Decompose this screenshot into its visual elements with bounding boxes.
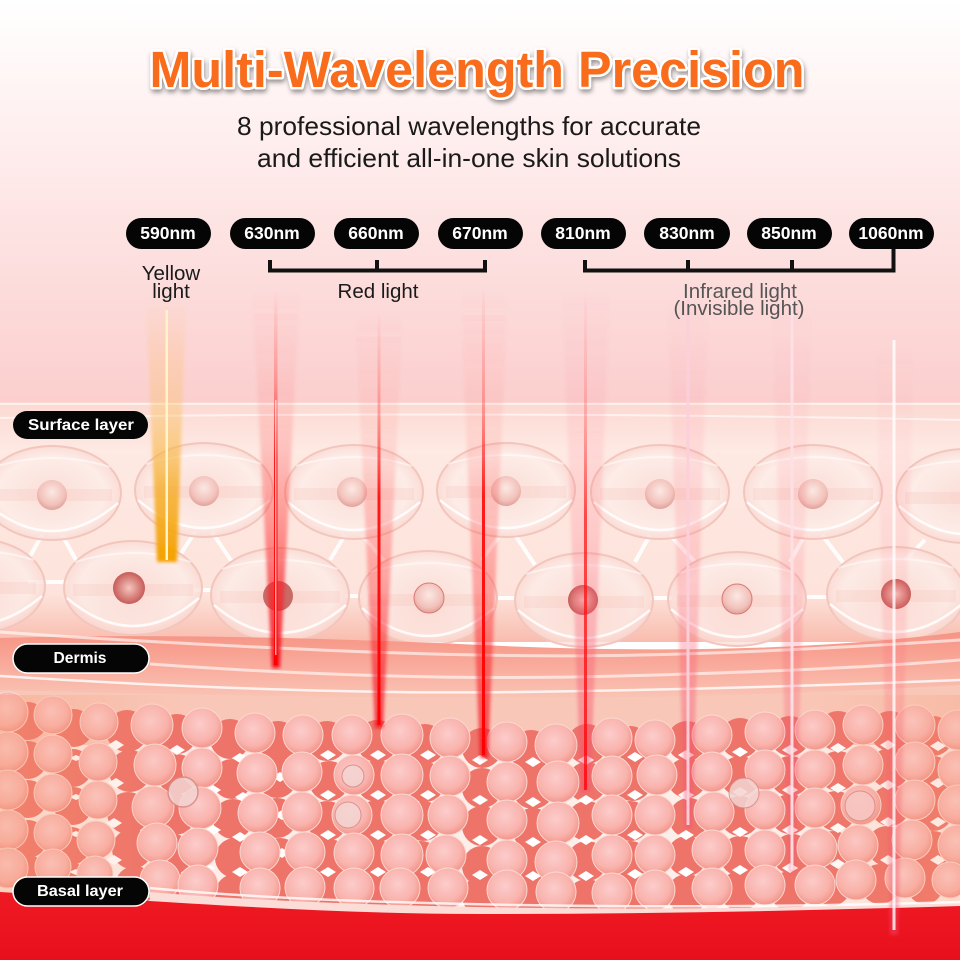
light beam: infrared 850nm: [772, 300, 812, 872]
top row cells: [0, 443, 960, 543]
bracket: red light: [270, 260, 485, 270]
tag: surface layer: [13, 411, 148, 439]
pill: 660nm: [334, 218, 419, 249]
panel: red bottom band: [0, 888, 960, 960]
label: infrared light: (Invisible light): [673, 297, 805, 320]
subtitle: and efficient all-in-one skin solutions: [257, 143, 681, 173]
epidermis cell connectors: [28, 532, 925, 598]
light beam: red 630nm: [252, 290, 300, 668]
pill: 830nm: [644, 218, 730, 249]
light beam: infrared 830nm: [668, 300, 708, 828]
pill: 1060nm: 1060nm: [858, 223, 924, 243]
pill: 670nm: [438, 218, 523, 249]
pill: 630nm: 630nm: [244, 223, 300, 243]
pill: 1060nm: [849, 218, 934, 249]
title: Multi-Wavelength Precision: [150, 41, 804, 98]
panel: basal layer balls: [0, 685, 960, 930]
highlight stem cells: [168, 765, 875, 828]
pill: 810nm: 810nm: [555, 223, 611, 243]
tag: basal layer: [13, 877, 149, 906]
tag: dermis: Dermis: [54, 650, 107, 667]
label: yellow light: light: [152, 280, 190, 303]
pill: 830nm: 830nm: [659, 223, 715, 243]
background gradient: [0, 0, 960, 410]
light beam: red 660nm: [355, 310, 403, 728]
pill: 630nm: [230, 218, 315, 249]
bracket: infrared light: [585, 249, 894, 270]
pill: 590nm: 590nm: [140, 223, 196, 243]
pill: 670nm: 670nm: [452, 223, 508, 243]
tag: dermis: [13, 644, 149, 673]
subtitle: [237, 111, 701, 173]
label: infrared light: [673, 280, 805, 320]
label: infrared light: Infrared light: [683, 280, 797, 303]
subtitle: 8 professional wavelengths for accurate: [237, 111, 701, 141]
label: yellow light: [142, 262, 200, 303]
bottom row cells: [0, 539, 960, 647]
label: yellow light: Yellow: [142, 262, 200, 285]
wavelength pills: [126, 218, 934, 249]
light beam: yellow 590nm: [146, 300, 186, 562]
pill: 850nm: [747, 218, 832, 249]
panel: skin surface layer: [0, 402, 960, 647]
pill: 810nm: [541, 218, 626, 249]
tag: basal layer: Basal layer: [37, 883, 123, 900]
light beam: infrared 810nm: [562, 290, 610, 792]
light beam: infrared 1060nm: [876, 340, 914, 935]
pill: 590nm: [126, 218, 211, 249]
pill: 660nm: 660nm: [348, 223, 404, 243]
panel: dermis layer: [0, 632, 960, 700]
light beam: red 670nm: [460, 285, 508, 758]
pill: 850nm: 850nm: [761, 223, 817, 243]
label: red light: Red light: [338, 280, 419, 303]
tag: surface layer: Surface layer: [28, 417, 134, 434]
